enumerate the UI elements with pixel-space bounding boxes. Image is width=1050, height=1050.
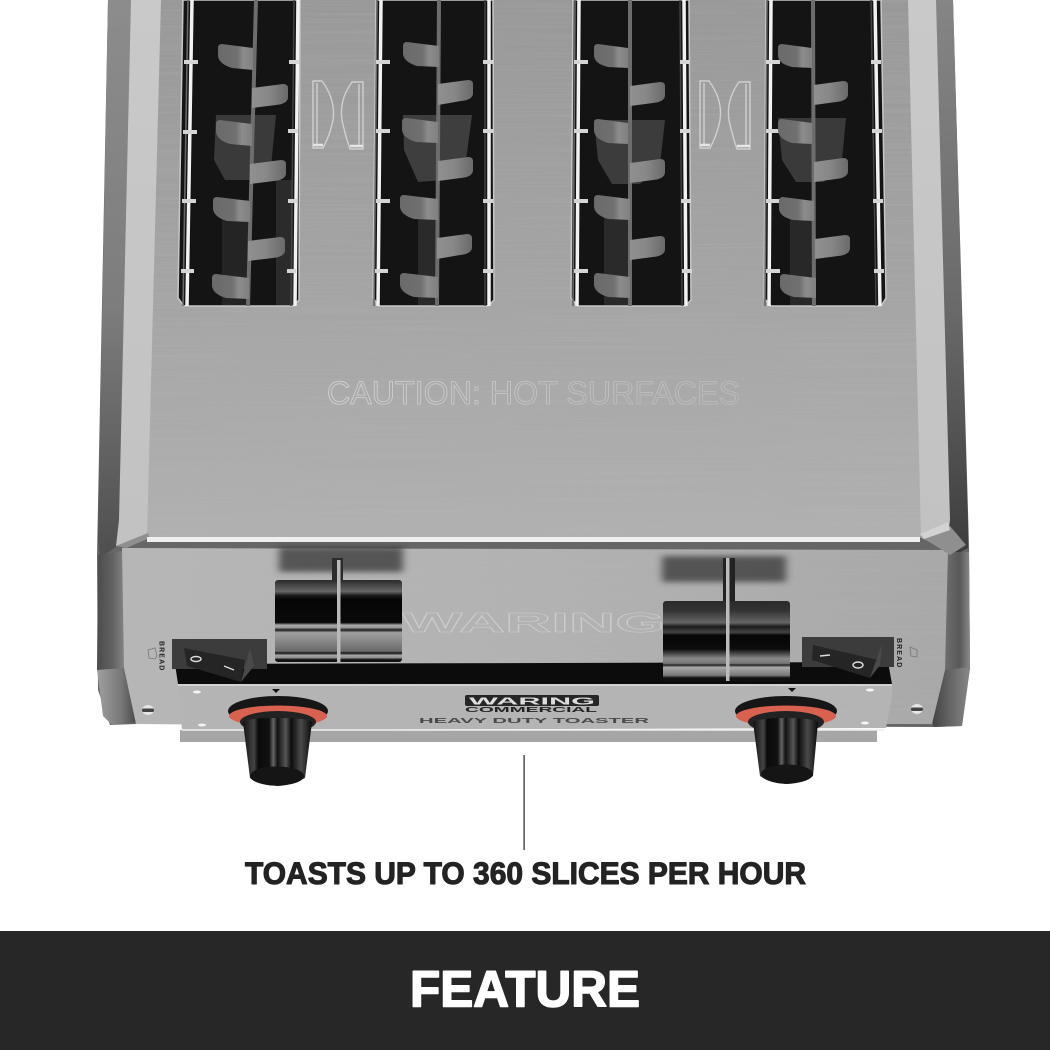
- bread label left: BREAD: [158, 641, 164, 671]
- left rocker switch: [172, 639, 267, 682]
- commercial text: COMMERCIAL: [465, 707, 599, 714]
- lower rail: [180, 730, 877, 742]
- toast slot 2: [373, 0, 494, 306]
- caution text: CAUTION: HOT SURFACES: [327, 375, 740, 411]
- toast slot 1: [178, 0, 300, 306]
- right rocker switch: [802, 637, 894, 678]
- product name: HEAVY DUTY TOASTER: [419, 716, 651, 725]
- leader line: [524, 755, 525, 850]
- footer banner: [0, 931, 1050, 1050]
- toast slot 4: [764, 0, 886, 306]
- embossed marks left: [313, 81, 363, 149]
- embossed marks right: [700, 81, 750, 149]
- left screw: [142, 705, 154, 715]
- left lever: [275, 547, 403, 662]
- waring badge: [465, 695, 599, 706]
- right dial: [735, 688, 837, 784]
- toaster body: [97, 0, 970, 727]
- switch marks: [820, 655, 830, 656]
- right dark side strip: [935, 0, 968, 558]
- feature caption: TOASTS UP TO 360 SLICES PER HOUR: [245, 855, 806, 891]
- icon: bread right: [910, 647, 917, 657]
- left dial: [228, 689, 328, 786]
- right bright bevel: [907, 0, 950, 550]
- right lever: [662, 556, 790, 681]
- right foot: [932, 667, 970, 727]
- front control plate: [178, 685, 892, 730]
- left lower side: [97, 550, 127, 670]
- left dark side strip: [98, 0, 132, 558]
- badge text: WARING: [469, 696, 596, 708]
- switch marks: [191, 656, 201, 662]
- body backing: [97, 0, 970, 727]
- bread label right: BREAD: [895, 638, 902, 668]
- icon: bread left: [148, 648, 157, 659]
- left foot: [97, 668, 138, 725]
- right screw: [911, 704, 923, 714]
- right lower side: [944, 552, 970, 671]
- toast slot 3: [571, 0, 692, 306]
- top edge highlight: [147, 537, 920, 542]
- front panel: [122, 548, 948, 724]
- embossed waring wordmark: WARING: [402, 607, 665, 638]
- corner folds: [116, 533, 150, 548]
- banner heading: FEATURE: [410, 960, 640, 1018]
- black recess strip: [175, 662, 892, 684]
- left bright bevel: [116, 0, 162, 546]
- top plate: [147, 0, 921, 537]
